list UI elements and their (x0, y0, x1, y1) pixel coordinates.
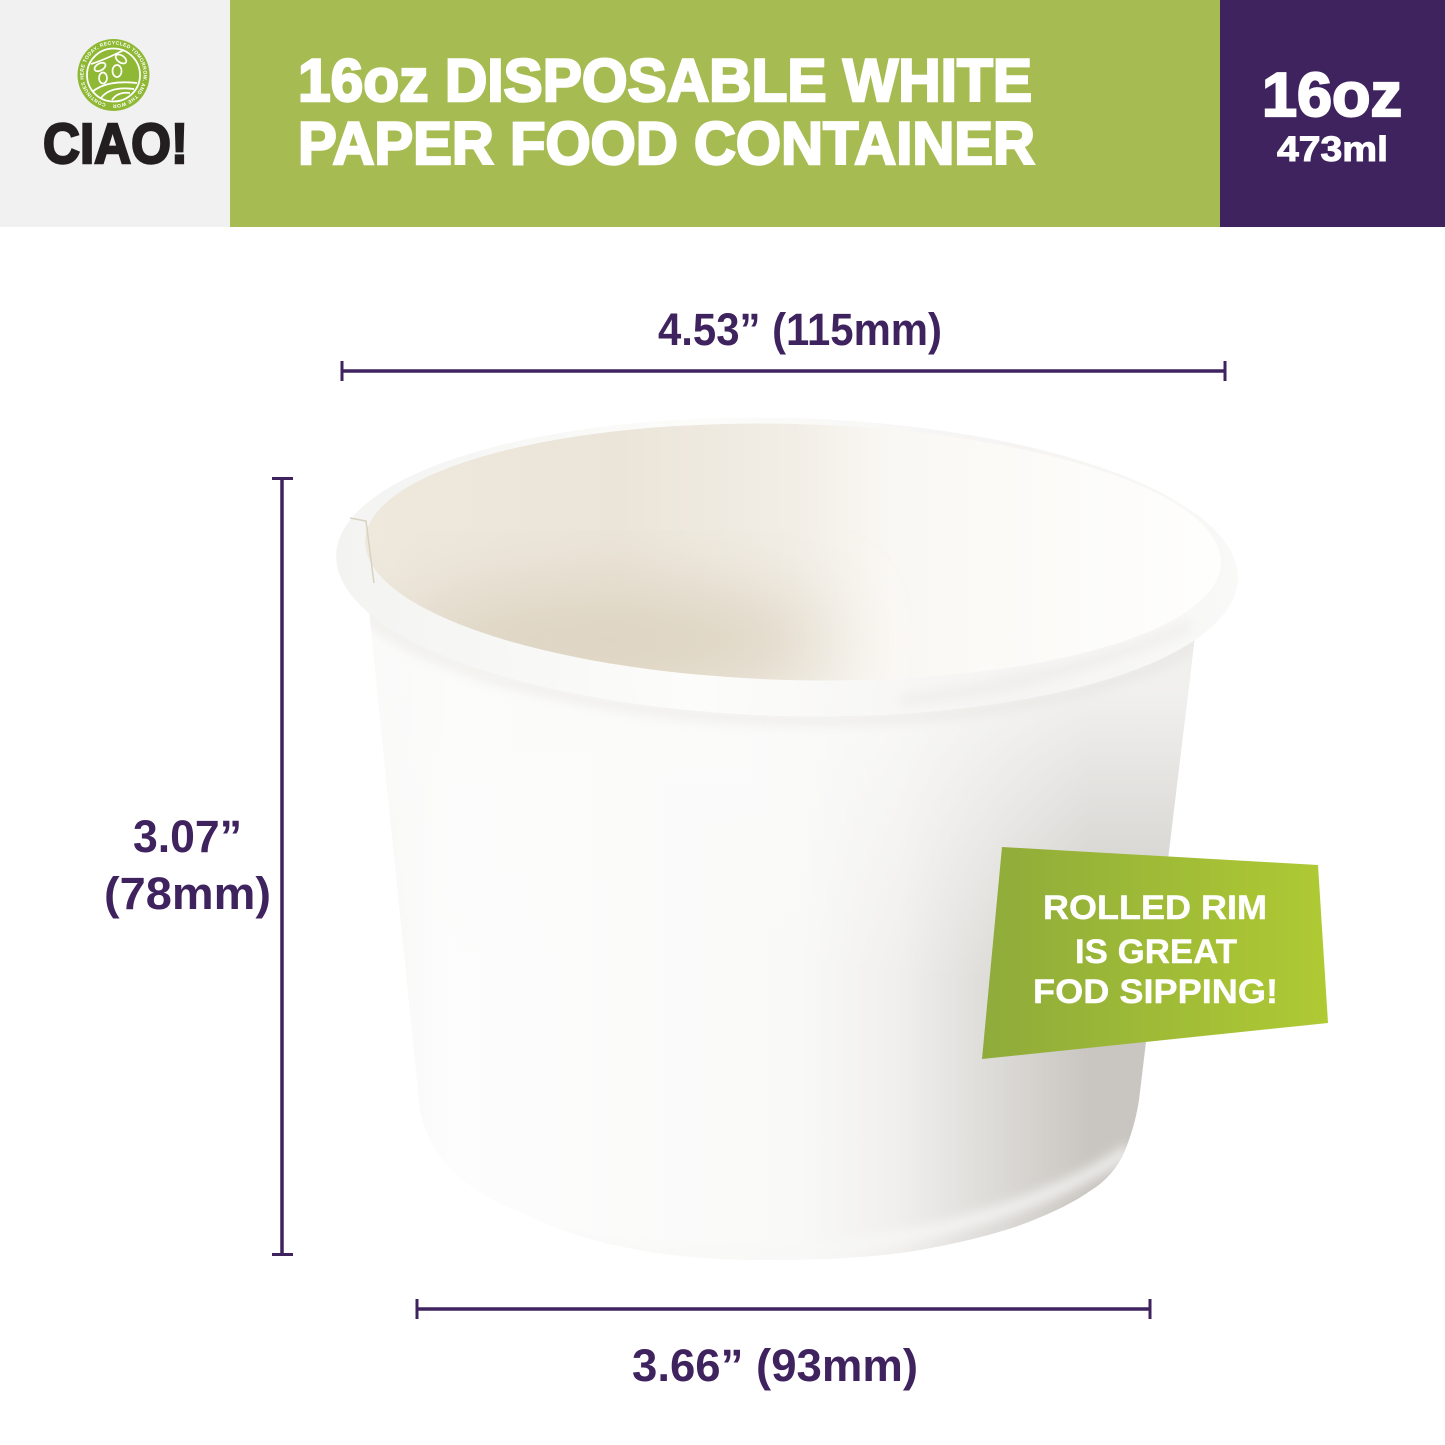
dimension: top width (342, 304, 1225, 381)
rim seam (350, 518, 374, 583)
dimension: height: 3.07” (133, 811, 242, 862)
rim shading along the lower edge (900, 625, 1190, 700)
paper cup (332, 406, 1242, 1270)
dimension: top width: 4.53” (115mm) (658, 304, 942, 355)
title text (298, 47, 1035, 177)
dimension: height (104, 478, 293, 1255)
capacity panel (1220, 0, 1445, 227)
dimension: bottom width (417, 1299, 1150, 1391)
callout: rolled rim: FOD SIPPING! (1033, 973, 1278, 1011)
callout: rolled rim (982, 847, 1328, 1059)
dimension: height: (78mm) (104, 868, 271, 919)
callout: rolled rim: ROLLED RIM (1043, 889, 1267, 927)
callout: rolled rim: IS GREAT (1075, 933, 1237, 971)
cup body (370, 614, 1194, 1259)
dimension: bottom width: 3.66” (93mm) (632, 1340, 918, 1391)
logo panel (0, 0, 230, 227)
logo wordmark: CIAO! (43, 112, 188, 176)
capacity: ounces: 16oz (1262, 61, 1402, 130)
title text: 16oz DISPOSABLE WHITE (298, 47, 1032, 114)
icon: olive branch seal (78, 39, 150, 111)
cup interior (365, 424, 1144, 680)
rolled rim (332, 406, 1242, 728)
header band (0, 0, 1445, 227)
capacity: millilitres: 473ml (1277, 130, 1388, 169)
title panel (230, 0, 1220, 227)
title text: PAPER FOOD CONTAINER (298, 110, 1035, 177)
